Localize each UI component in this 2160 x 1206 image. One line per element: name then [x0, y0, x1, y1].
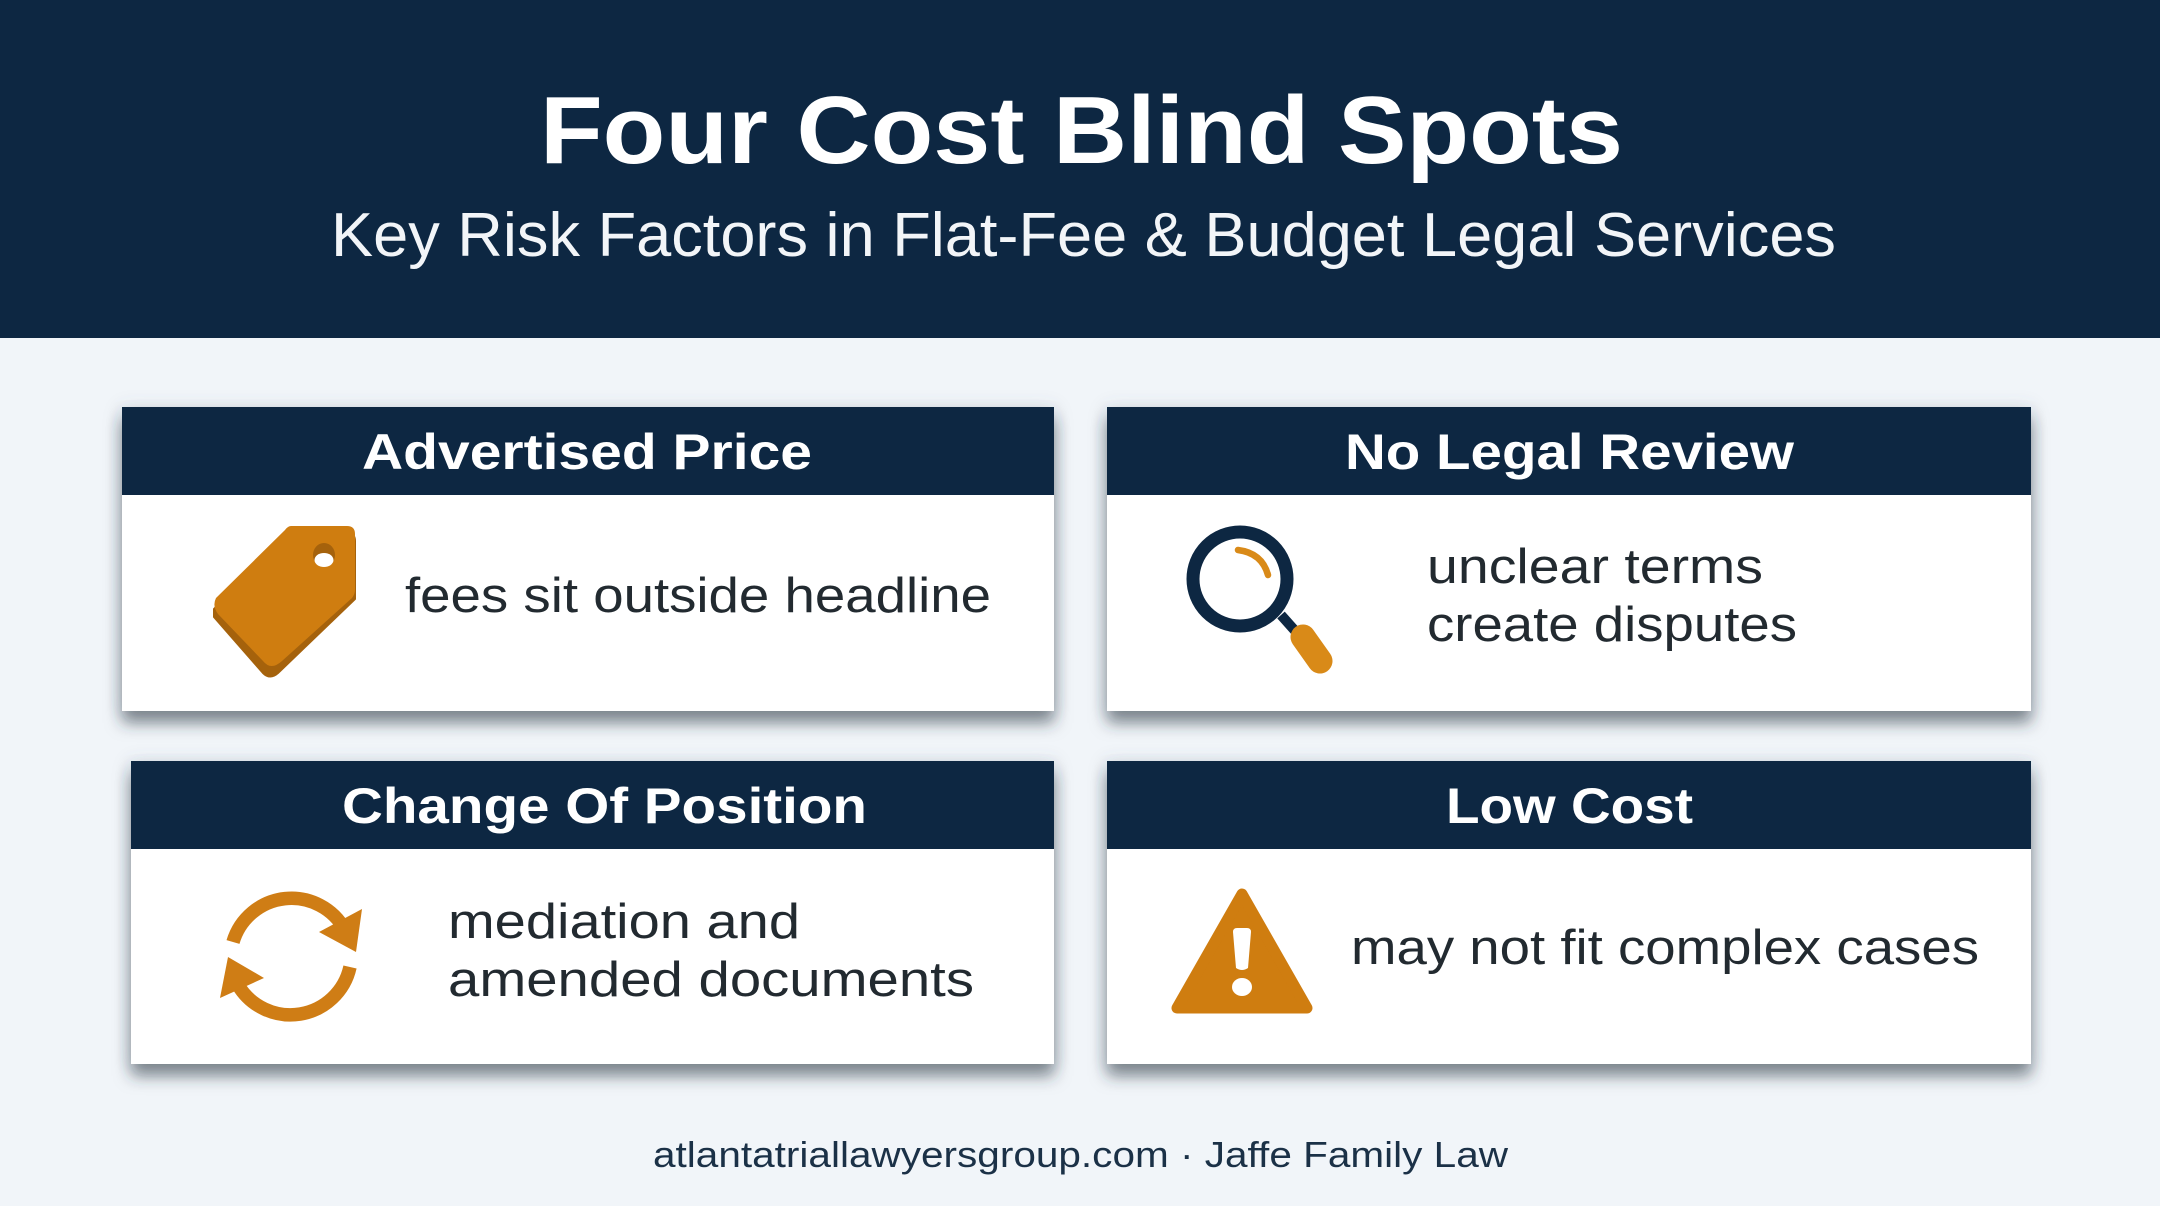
panel: advertised price: [122, 407, 1054, 711]
text: mediation: amended documents: [448, 953, 974, 1007]
text: mediation: [448, 895, 974, 1007]
icon: price tag: [214, 526, 355, 676]
icon: warning triangle: [1177, 894, 1307, 1008]
header banner: [0, 0, 2160, 338]
heading: no legal review: No Legal Review: [1345, 424, 1794, 480]
text: unclear terms: create disputes: [1427, 598, 1797, 652]
text: unclear terms: [1427, 540, 1797, 652]
heading: low cost: Low Cost: [1446, 778, 1693, 834]
panel: no legal review: [1107, 407, 2031, 711]
text: mediation: mediation and: [448, 895, 800, 949]
panel: low cost: [1107, 761, 2031, 1064]
heading: change of position: Change Of Position: [342, 778, 867, 834]
panel: change of position: [131, 761, 1054, 1064]
icon: magnifying glass: [1193, 532, 1320, 661]
text: complex cases: may not fit complex cases: [1351, 921, 1979, 975]
footer source line: atlantatriallawyersgroup.com · Jaffe Family Law: [653, 1134, 1509, 1175]
icon: circular arrows: [220, 898, 362, 1015]
title: Four Cost Blind Spots: [540, 77, 1623, 184]
subtitle: Key Risk Factors in Flat-Fee & Budget Legal Services: [331, 201, 1836, 270]
text: unclear terms: unclear terms: [1427, 540, 1763, 594]
text: fees: fees sit outside headline: [405, 569, 991, 623]
heading: advertised price: Advertised Price: [362, 424, 812, 480]
